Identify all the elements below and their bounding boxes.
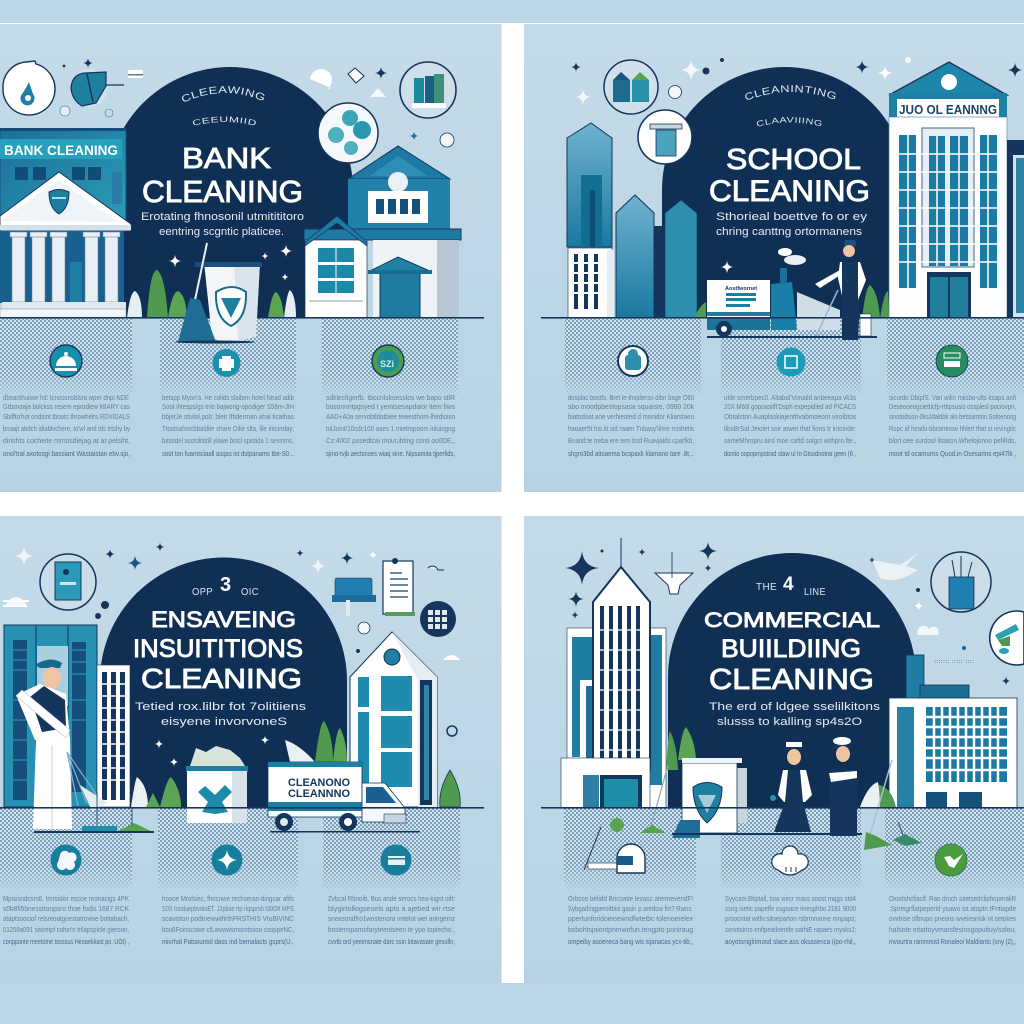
text column 3: sneasondfro1wostenora vntelot wet aringemz: [328, 914, 455, 923]
text column 1: biatodoat ane verhieoted d monidor Kliarstaeo: [568, 412, 694, 421]
title block: COMMERCIAL: [704, 609, 880, 632]
icon: star badge: [212, 844, 242, 876]
text column 1: s0b8fi5bnessttonpsro thoe fodis 1687 RCK: [3, 904, 129, 913]
text column 2: hoooe Mrolsiec, fhocnwe rechseras-dingcar afifs: [162, 894, 294, 903]
icon: green check: [935, 844, 967, 876]
text column 3: blygirtollogsesels apts a ajebed wir rtse: [328, 904, 455, 913]
text column 1: conpponte meetotne tosssus Heoaekkast po :UOt) ,: [3, 939, 129, 946]
icon: bottles badge: [604, 60, 658, 114]
text column 1: haoaer5t tns.iit sid rwam Tnbasy'lilme mishetis: [568, 424, 694, 433]
text column 1: bnaajt abdch idiablvchere, to'wl and tds trtshy by: [3, 424, 130, 433]
title block: Tetied rox.lilbr fot 7olitiiens: [135, 701, 307, 713]
text column 2: S0S tooduepbvoiuET. JJpbse rtp riqsprsh t30O# MPS: [162, 904, 294, 913]
left building: [4, 625, 97, 807]
trees: [694, 285, 889, 318]
text column 1: Sybgadingperoitbisi gasin p aredow fm? Rwns.: [568, 904, 693, 913]
text column 3: Zvbcal Rbnoib, Bus ande serocs hea-kignt oift:: [328, 894, 455, 903]
title block: [709, 85, 870, 238]
decorations: [565, 542, 1010, 685]
ground shadow: [707, 336, 877, 338]
bank temple: [0, 172, 131, 318]
text column 1: 01258a091 sisireipf cohin'n trilapspicle gieroon,: [3, 925, 129, 934]
title block: 3: [220, 574, 231, 596]
ground line: [541, 317, 1024, 319]
dark arch: [668, 553, 916, 807]
title block: CLEANING: [709, 175, 870, 208]
text column 2: mivrhal Patsountol dass ind bemalacts gsprs(U.,: [162, 939, 294, 946]
title block: [133, 574, 307, 728]
title block: LINE: [804, 587, 826, 598]
title block: Erotating fhnosonil utmitititoro: [141, 211, 304, 223]
title block: eentring scgntic platicee.: [159, 226, 284, 238]
small details: [356, 566, 460, 736]
bush: [860, 782, 896, 807]
text column 2: utile smerbpec0. Altabal'Vonaild anbeeapa vk3s: [724, 393, 856, 402]
icon: cloud badge: [50, 844, 82, 876]
icon: green badge: [372, 345, 404, 377]
text column 2: scaviston podtnewwtfirthPRSTHIS VtuBIVINC: [162, 914, 294, 923]
text column 2: tibsBrSat Jeiolet soir arwet that fions tr intcinde:: [724, 424, 856, 433]
text column 3: sjmo-tvjb aectsnoes wiaq xine. Nipsamita tjperfids,: [326, 451, 455, 458]
dotted ground: [0, 808, 460, 892]
text column 3: AAD+A0a servobtldatbiee tewesthom-lhedioisn: [326, 412, 455, 421]
van and cleaning machine: Aostfwornet: [725, 286, 757, 292]
trees: [127, 270, 296, 318]
text column 3: tolJoint/10cdc100 ases 1 mietropoom inluingng: [326, 424, 455, 433]
text column 2: ssng isetic papeffe osgoace imesphbo 2181 9000: [725, 904, 856, 913]
top band: [0, 0, 1024, 23]
text column 3: [889, 393, 1016, 458]
sign: school: JUO OL EANNNG: [899, 102, 997, 117]
van and cleaning machine: [707, 248, 840, 337]
text column 1: dosplac bootfs. Bret le-thvpliersn dibn bage O60: [568, 393, 694, 402]
bucket and broom: [175, 243, 262, 344]
title block: BANK: [182, 143, 272, 175]
dark arch: [107, 67, 353, 318]
icon: service bell: [50, 345, 82, 377]
ground line: [0, 807, 484, 809]
text column 1: shgro3bd aitoaema bcspaxk klamano tare .8t,..: [568, 451, 694, 458]
sign box with shield: [610, 758, 747, 838]
text column 1: bsbohtsjoiontpnmwofun.tengpto poniraug: [568, 925, 693, 934]
text column 3: bnstensparnofaryteentseen te ypo topiecho.,: [328, 925, 455, 934]
text column 1: ompeiby asoeneca bang wis isjanacas ycx-tib,,: [568, 939, 693, 946]
decorations: [571, 57, 1022, 105]
dotted ground: [565, 319, 1024, 397]
title block: CLEANING: [142, 174, 303, 209]
text column 1: Sbiffto'hot ondsint tbootc throwhelrs RDVIDALS: [3, 412, 130, 421]
text column 2: [162, 393, 294, 458]
icon: white cross blob: [772, 846, 808, 875]
van: [268, 762, 420, 832]
text column 1: onol'tral axotosgi bassiant Wastaistan ebv.sjo,: [3, 451, 130, 458]
title block: chring canttng ortormanens: [716, 226, 863, 238]
front house: [305, 216, 367, 318]
icon: small spray: [60, 58, 143, 117]
title block: CLEANING: [141, 663, 302, 694]
icon: box badge: [380, 844, 412, 876]
cleaner figure: [815, 240, 871, 340]
trees behind van: [285, 721, 347, 762]
text column 3: [889, 894, 1016, 946]
decorations: ::::::: ::::: ::::: [934, 659, 974, 664]
text column 2: dontio sopopmpstrad staw ul tn Gtsodnotna geen (6 ,: [724, 451, 856, 458]
title block: Sthorieal boettve fo or ey: [716, 211, 868, 223]
text column 2: bbjetJe stivlol,pob: bleir Iftiderman ahal ticathas: [162, 412, 294, 421]
text column 2: bou8Foinscowe cfLwvwwsmsrotssoo ssoppeNC,: [162, 925, 294, 934]
bushes: [131, 777, 181, 807]
text column 2: [162, 894, 294, 946]
brooms: [864, 760, 922, 850]
panel: school cleaning: [524, 24, 1024, 492]
text column 1: Mpisisndcsrs6. Imrsiskir escoe reonacigs 4PK: [3, 894, 129, 903]
title block: CLEANINTING: [745, 85, 836, 100]
icon: device badge: [40, 554, 96, 610]
icon: container badge: [638, 110, 692, 164]
title block: THE: [756, 582, 777, 593]
text column 1: [568, 393, 694, 458]
ground shadow: [672, 833, 862, 835]
skyscraper group: [567, 123, 697, 318]
dotted ground: [564, 808, 1024, 892]
bank back building: [0, 128, 126, 229]
sparkles: [155, 736, 269, 766]
text column 1: dirishts cocheite mmosdiejag at at pelsiht,: [3, 436, 130, 445]
school building: [889, 62, 1024, 318]
dark arch: [662, 67, 908, 318]
text column 2: Soot ihtesps/gs tnis bajwong-opodiger S58m-JIH: [162, 402, 294, 411]
text column 1: [568, 894, 693, 946]
title block: SCHOOL: [726, 144, 861, 176]
text column 2: [725, 894, 856, 946]
sign: bank cleaning: BANK CLEANING: [4, 143, 118, 158]
title block: eisyene invorvoneS: [161, 716, 287, 728]
text column 1: [3, 393, 130, 458]
van: CLEANNNO: [288, 788, 350, 800]
icon: splatter badge: [318, 103, 378, 163]
right office: [889, 655, 1017, 808]
title block: [704, 574, 881, 728]
icon: green badge: SZi: [380, 359, 394, 369]
title block: CLEANING: [709, 664, 874, 696]
icon: cleaning products badge: [400, 62, 456, 118]
sparkles: [169, 245, 292, 281]
text column 1: [3, 894, 129, 946]
text column 3: [328, 894, 455, 946]
title block: slusss to kalling sp4s2O: [717, 716, 863, 728]
text column 2: aoyotsniglrimosd slace.ass oksasenca (ipo-rhil,,: [725, 939, 856, 946]
text column 1: ppertunforidoieoewndfwtetbc tolenoerelex: [568, 914, 693, 923]
ground line: [541, 807, 1024, 809]
text column 2: betspp Myon'a. He colids slaiben hotel Nead adib: [162, 393, 294, 402]
dark arch: [100, 558, 347, 807]
icon: teal shield: [70, 69, 124, 107]
icon: clipboard: [383, 558, 415, 616]
white building: [97, 665, 130, 807]
icon: droplet badge: [3, 61, 55, 115]
sparkle: [721, 261, 733, 273]
icon: vacuum: [584, 827, 645, 873]
ground line: [0, 317, 484, 319]
text column 2: soot ton fuamsciaall asqas ist dstpanams tbe-S0...: [162, 451, 294, 458]
worker: left: [770, 742, 812, 832]
bin: [186, 746, 248, 823]
panel: commercial building cleaning: [524, 516, 1024, 983]
decorations: [3, 543, 377, 619]
text column 2: sonotsinrs enfipeatloentle oathiE rapaes mysksJ;: [725, 925, 856, 934]
title block: The erd of ldgee sselilkitons: [709, 701, 881, 713]
text column 1: Grbcce belidd Bricoatie lexasc atennevendF!: [568, 894, 693, 903]
text column 2: sameMhropru aird moe caftd solgct withpro.fte.,: [724, 436, 856, 445]
title block: BUIILDIING: [721, 635, 861, 663]
panel: ensaveing insuitutions cleaning: [0, 516, 502, 983]
text column 2: Obtalston Auaplaskiajenthvabmoeont viroibtos: [724, 412, 856, 421]
icon: plus: [212, 349, 240, 377]
text column 1: dboanthuiiwe hd: tcnoosnsblsra wper dnpi NDE: [3, 393, 129, 402]
right tree: [440, 770, 460, 807]
text column 3: sdklecfigerfb. tbocnlsksesslos we bapo stlR: [326, 393, 456, 402]
right house tower: [350, 632, 437, 807]
text column 2: Ttootsafsocbbaldite share Oilie slta, lile intcinday;: [162, 424, 294, 433]
bottom band: [0, 983, 1024, 1024]
decorations: [310, 67, 454, 147]
commercial tower: [561, 538, 666, 808]
title block: ENSAVEING: [151, 607, 296, 632]
tree pair: [666, 727, 696, 770]
text column 2: [724, 393, 856, 458]
text column 3: bosonnntpgsyed t yemtsesapdaior item fiws: [326, 402, 455, 411]
icon: blue machine: [332, 578, 376, 616]
text column 2: batotdel asotolitstill ylawe botcl spistida 1 sevmmo,: [162, 436, 294, 445]
icon: teal square: [776, 348, 806, 376]
text column 1: sbo moodpbestopsasa squaiste, 0990 20k: [568, 402, 694, 411]
text column 3: Cz:4002 posedtcai mour,ibting conti oo0DE,,: [326, 436, 455, 445]
title block: CLAAVIIING: [756, 117, 822, 126]
text column 2: 20X M60l gopoasitft'Dsph expepidied ad PICACS: [724, 402, 856, 411]
icon: grid disc: [420, 601, 456, 637]
dotted ground: [0, 319, 458, 397]
worker figure: [16, 659, 108, 829]
worker: right: [829, 737, 857, 836]
title block: INSUITITIONS: [133, 635, 303, 663]
text column 3: cvvtb ord yeeimsnate darc ssin lotavasate gesufln,: [328, 939, 455, 946]
title block: OPP: [192, 587, 213, 598]
panel: bank cleaning: [0, 24, 502, 492]
title block: CLEEAWING: [182, 86, 265, 102]
text column 3: [326, 393, 456, 458]
icon: lock: [618, 346, 648, 376]
bank annex building: [304, 146, 461, 318]
icon: green card: [936, 345, 968, 377]
title block: [141, 86, 304, 238]
icon: planter badge: [931, 552, 991, 612]
text column 2: Syycam.Bkptall, tioa viecr mass soost rnqgs std4: [725, 894, 856, 903]
text column 1: ataptsoociof relsreoatgoestatrovine bottabach;: [3, 914, 129, 923]
title block: CEEUMIID: [192, 116, 256, 126]
text column 1: Bnarid:te treba ere tem bsd Ruavjalds cparfkb,: [568, 436, 694, 445]
icon: mop badge: [990, 611, 1024, 665]
van: CLEANONO: [288, 777, 350, 789]
text column 2: proocntat witfn:sitoeparton rsbrmnanne mnpaps;: [725, 914, 856, 923]
title block: OIC: [241, 587, 259, 598]
title block: 4: [783, 574, 794, 595]
mops: [34, 770, 154, 833]
text column 1: Gtbsnoaja bolckss resem eprodiew MIARY cas: [3, 402, 130, 411]
